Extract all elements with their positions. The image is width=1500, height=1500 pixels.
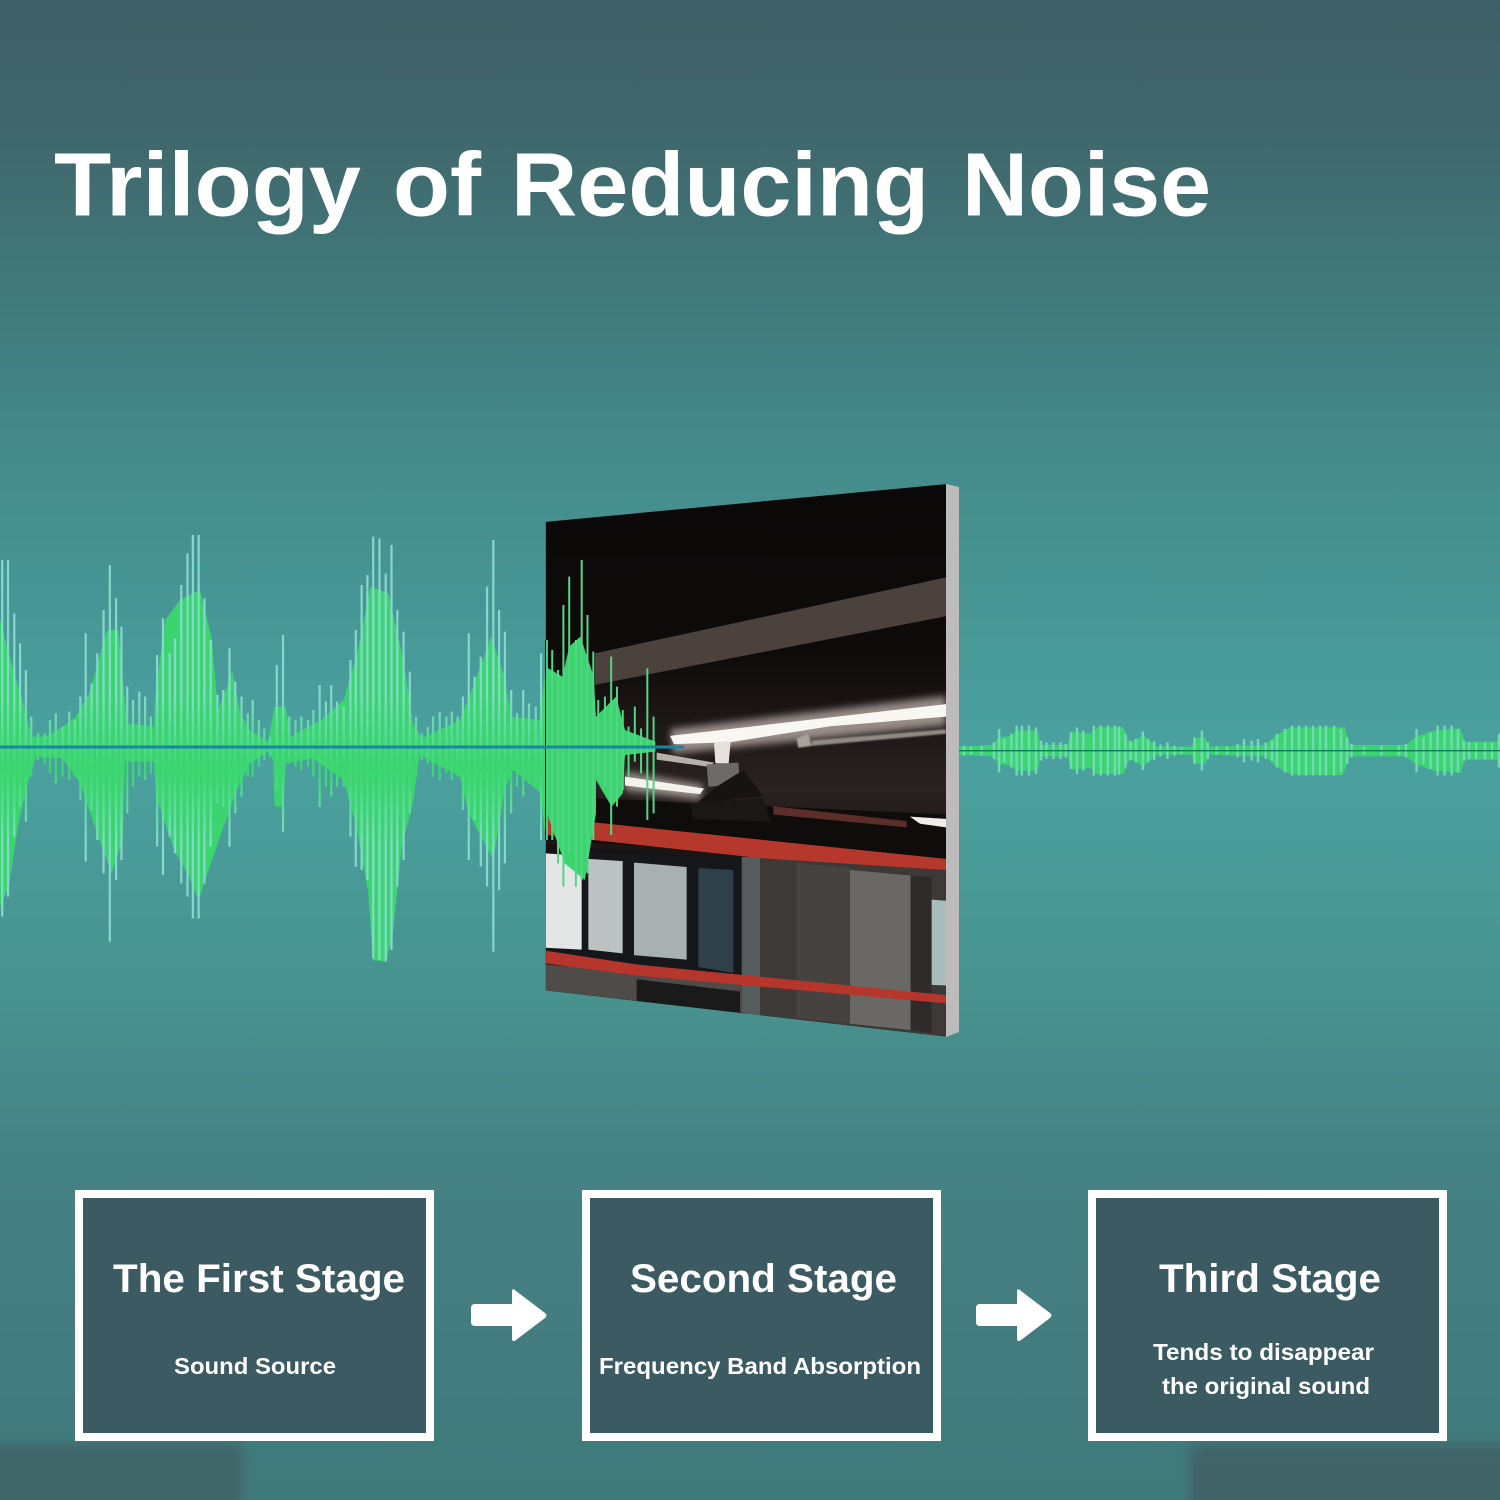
arrow 2 [976, 1289, 1052, 1341]
arrow 1 [471, 1289, 546, 1341]
reduced wave body [959, 726, 1500, 776]
reduced wave centre line [959, 750, 1500, 751]
panel side edge [946, 484, 959, 1037]
box frame [79, 1194, 430, 1437]
title: Reducing [511, 136, 929, 236]
stage box 1 [79, 1194, 430, 1437]
caption: Sound Source [174, 1353, 336, 1379]
heading: Second Stage [630, 1257, 897, 1301]
heading: Third Stage [1159, 1257, 1381, 1301]
title: of [393, 136, 482, 236]
caption: Frequency Band Absorption [599, 1353, 921, 1379]
stage box 2 [586, 1194, 937, 1437]
heading: The First Stage [113, 1257, 405, 1301]
bottom shading [0, 1445, 1500, 1500]
box frame [1092, 1194, 1443, 1437]
title [54, 136, 1211, 236]
title: Noise [962, 136, 1211, 236]
acoustic panel [546, 484, 959, 1040]
title: Trilogy [54, 136, 361, 236]
wave centre line [0, 746, 684, 748]
wave body [0, 587, 655, 962]
stage box 3 [1092, 1194, 1443, 1437]
wave spikes [2, 535, 654, 962]
caption line 1: Tends to disappear [1153, 1339, 1374, 1365]
sound wave: input, before panel [0, 535, 684, 962]
caption line 2: the original sound [1162, 1373, 1370, 1399]
panel photo: ceiling with lights and red pipes [546, 484, 946, 1040]
box frame [586, 1194, 937, 1437]
sound wave: output, after panel [959, 726, 1500, 776]
